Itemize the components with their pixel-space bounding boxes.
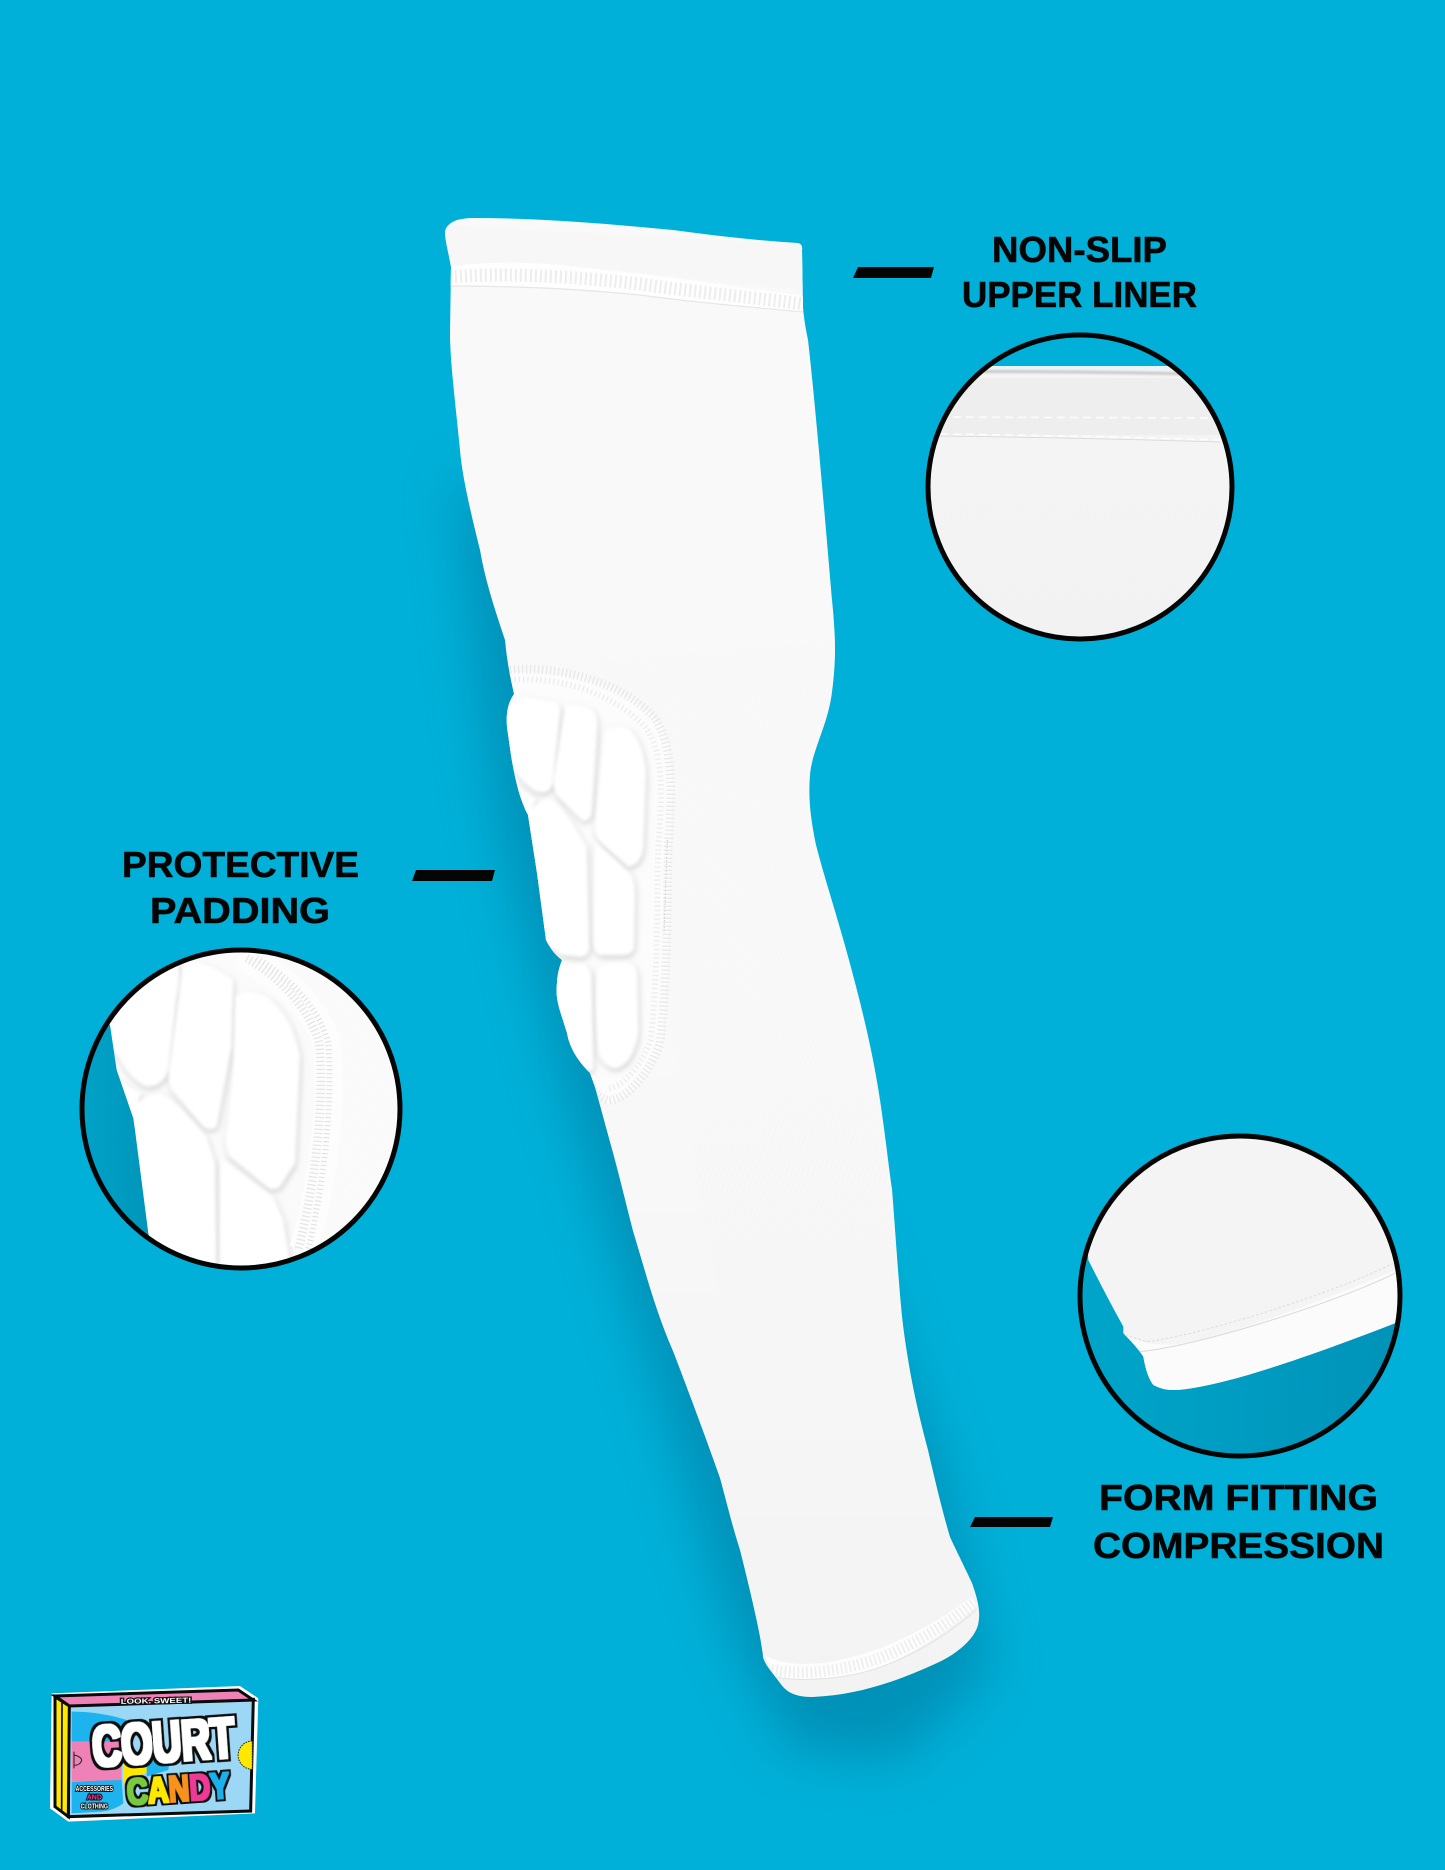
box top face — [55, 1690, 253, 1706]
upper band shading — [445, 225, 805, 290]
box outline — [50, 1686, 258, 1822]
label — [122, 844, 359, 931]
box seal — [238, 1741, 252, 1769]
upper hem seam — [450, 268, 803, 312]
wordmark: COURT: COURT — [90, 1706, 237, 1780]
label — [962, 229, 1197, 315]
sleeve fabric texture — [600, 640, 900, 1300]
lower hem seam — [765, 1597, 977, 1680]
label: UPPER LINER — [962, 274, 1197, 315]
sleeve body — [445, 218, 979, 1697]
label: PROTECTIVE — [122, 844, 359, 885]
label — [1093, 1477, 1384, 1566]
leader bar — [412, 870, 495, 881]
label: COMPRESSION — [1093, 1525, 1384, 1566]
detail circle: cuff — [1080, 1120, 1407, 1456]
box caption: ACCESSORIES — [76, 1786, 113, 1793]
wordmark: CANDY: CANDY — [125, 1764, 231, 1813]
product: padded arm sleeve — [445, 218, 979, 1697]
box caption: AND — [87, 1795, 102, 1802]
logo: Court Candy box — [50, 1686, 258, 1822]
callout: non-slip upper liner — [853, 236, 1234, 642]
sleeve drop shadow — [455, 470, 990, 1760]
callout: protective padding — [70, 844, 495, 1283]
padded elbow section — [500, 669, 672, 1103]
leader bar — [853, 267, 934, 278]
box colour panels — [72, 1712, 172, 1813]
label: FORM FITTING — [1099, 1477, 1378, 1518]
brand tagline: LOOK. SWEET! — [121, 1696, 191, 1706]
box side face — [55, 1697, 69, 1817]
label: NON-SLIP — [992, 229, 1167, 270]
pad cells — [500, 697, 646, 1070]
box caption: CLOTHING — [81, 1804, 108, 1811]
leader bar — [970, 1517, 1053, 1527]
detail circle: upper liner — [926, 332, 1234, 642]
label: PADDING — [150, 890, 330, 931]
detail circle: padding — [70, 943, 407, 1283]
pad seam — [510, 669, 671, 1101]
box caption — [76, 1786, 113, 1811]
box front face — [68, 1699, 253, 1817]
pad base — [506, 672, 596, 1090]
callout: form fitting compression — [970, 1120, 1407, 1566]
